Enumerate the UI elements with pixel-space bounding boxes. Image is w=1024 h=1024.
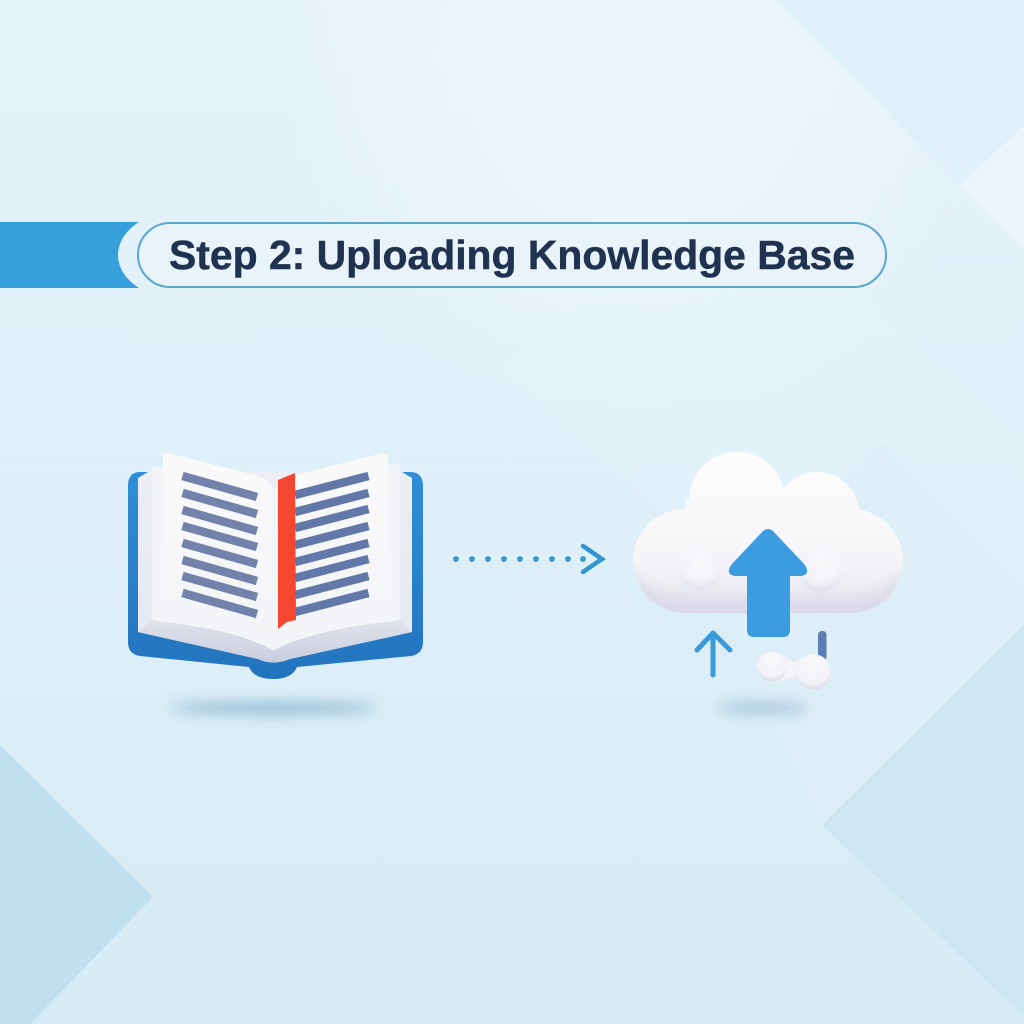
icon: cloud upload — [630, 452, 905, 713]
cloud shadow — [717, 703, 809, 713]
large upload arrow — [729, 529, 807, 637]
book cover — [128, 472, 423, 679]
red bookmark — [278, 473, 296, 629]
banner blue tab — [0, 222, 139, 288]
left page text lines — [182, 476, 257, 614]
small upload arrow — [697, 633, 730, 675]
cloud bumps — [680, 550, 720, 590]
dotted arrow — [453, 546, 602, 572]
page bevel — [138, 620, 412, 662]
right page text lines — [295, 476, 368, 612]
right page — [275, 453, 388, 645]
lower pages — [152, 463, 400, 650]
left page — [163, 453, 273, 645]
cloud body — [630, 452, 905, 620]
book shadow — [168, 702, 378, 714]
title banner — [0, 222, 886, 288]
connector node — [757, 652, 831, 690]
title pill — [138, 223, 886, 287]
icon: open book — [128, 453, 423, 714]
title text: Step 2: Uploading Knowledge Base — [169, 232, 855, 278]
blue bar — [818, 631, 826, 661]
page block — [138, 472, 412, 662]
